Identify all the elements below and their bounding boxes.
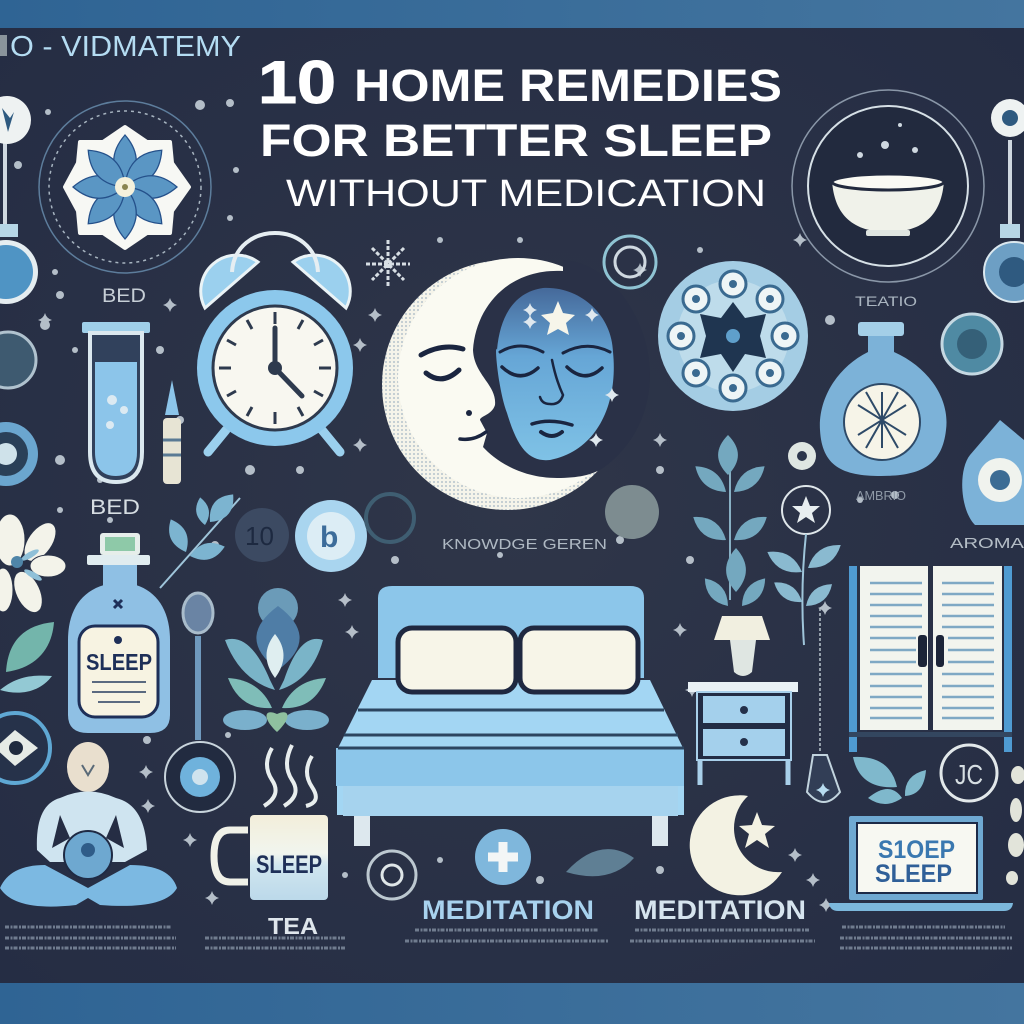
icon: moon and face (382, 258, 650, 510)
title: WITHOUT MEDICATION (286, 173, 766, 215)
label: AMBRIO: AMBRIO (856, 488, 906, 503)
label: TEATIO: TEATIO (855, 293, 917, 309)
icon: leaf (566, 849, 634, 876)
icon: right diffuser (962, 420, 1024, 525)
label: BED lower: BED (90, 496, 140, 519)
icon: pale orb (605, 442, 816, 539)
icon: tall plant (689, 435, 771, 611)
labels: meditation (422, 895, 806, 925)
icon: right hanging jars (984, 99, 1024, 302)
brand label: O - VIDMATEMY (10, 31, 241, 63)
label: TEA: TEA (268, 913, 318, 939)
icon: laptop (829, 816, 1013, 911)
icon: bowl medallion (792, 90, 984, 282)
title: HOME REMEDIES (354, 60, 782, 111)
icon: small snowflake (366, 240, 410, 288)
icon: ring right of title (604, 236, 656, 288)
icon: bed (336, 586, 684, 846)
icon: herb plant (223, 588, 329, 732)
icon: sleep mug (214, 815, 328, 900)
icon: spoon (183, 593, 213, 740)
caption lines (5, 927, 1012, 948)
icon: wardrobe (849, 566, 1012, 752)
labels: meditation: MEDITATION (422, 895, 594, 925)
icon: laptop: S1OEP (878, 836, 955, 864)
icon: test tube (82, 322, 150, 482)
icon: small leaves right (853, 757, 926, 804)
icon: coin glyph (941, 745, 997, 801)
label: AROMA: AROMA (950, 535, 1024, 552)
icon: hanging bulb (807, 608, 840, 802)
icon: small syringe vial (163, 380, 181, 484)
icon: star flower (764, 486, 845, 645)
icon: circular gauge (165, 742, 235, 812)
title (258, 49, 782, 215)
icon: laptop: SLEEP (875, 860, 952, 888)
label: BED upper: BED (102, 286, 146, 307)
icon: sleep bottle: SLEEP (86, 649, 152, 675)
title: FOR BETTER SLEEP (260, 115, 772, 166)
icon: round vial right (942, 314, 1002, 374)
label: KNOWDGE: KNOWDGE GEREN (442, 536, 607, 553)
icon: 10 and b badges: b (320, 521, 338, 554)
icon: 10 and b badges: 10 (245, 521, 274, 551)
icon: mandala (658, 261, 808, 411)
icon: leaf sprig left (160, 489, 240, 588)
icon: left hanging jars (0, 96, 38, 486)
scattered sparkles (14, 99, 993, 912)
icon: 10 and b badges (235, 494, 414, 572)
labels: meditation: MEDITATION (634, 895, 806, 925)
icon: meditating person (0, 742, 177, 907)
icon: alarm clock (197, 233, 353, 452)
icon: round potion bottle (820, 322, 947, 476)
icon: flower medallion (39, 101, 211, 273)
icon: sleep mug: SLEEP (256, 851, 322, 879)
icon: crescent and star (690, 795, 782, 895)
icon: nightstand (688, 682, 798, 785)
icon: bedside lamp (714, 616, 770, 676)
icon: steam (264, 745, 316, 806)
icon: left flower (0, 514, 66, 783)
icon: coin glyph: JC (955, 759, 983, 790)
icon: plus circle (475, 829, 531, 885)
icon: ring gauge bottom (368, 851, 416, 899)
icon: sleep bottle (68, 533, 170, 733)
title: 10 (258, 49, 336, 116)
icon: right edge pile (1006, 766, 1024, 885)
